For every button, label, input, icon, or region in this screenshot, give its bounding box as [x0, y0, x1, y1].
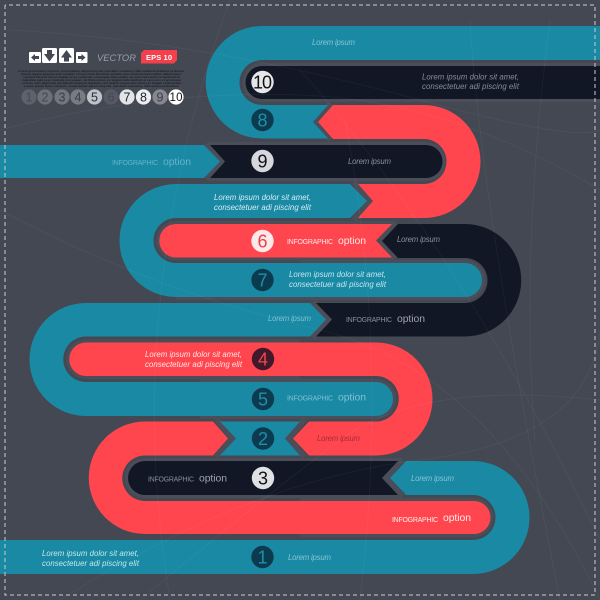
number row: 2	[42, 90, 49, 104]
step 2 badge	[252, 427, 274, 450]
label: row five	[287, 392, 366, 404]
caption: bottom left	[42, 549, 140, 568]
caption: teal lower right: Lorem ipsum	[411, 474, 454, 483]
label: row five: INFOGRAPHIC	[287, 396, 333, 402]
caption: top dark: Lorem ipsum dolor sit amet,	[422, 72, 519, 82]
number row: 7	[124, 90, 131, 104]
step 4 badge: 4	[258, 350, 268, 370]
badge: EPS 10: EPS 10	[146, 53, 172, 62]
label: row six red: option	[338, 236, 366, 247]
small print text block	[18, 69, 184, 88]
caption: dark notch: Lorem ipsum	[397, 235, 440, 244]
badge: EPS 10	[141, 50, 177, 64]
step 2 badge: 2	[258, 429, 268, 449]
caption: top dark: consectetuer adi piscing elit	[422, 82, 520, 91]
band: teal top curve	[206, 26, 600, 138]
label: dark middle: INFOGRAPHIC	[346, 317, 392, 324]
band: dark curve right	[316, 224, 521, 337]
small print text block: dolore magna aliquam erat volutpat. Ut wisi enim ad minim veniam, quis nostrud exerci tation ullamcorper	[21, 72, 182, 76]
small print text block: Lorem ipsum dolor sit amet, consectetuer adi piscing elit, sed diam nonummy nibh euismod tincidunt	[24, 84, 179, 88]
band: red curve middle right	[69, 342, 432, 456]
step 5 badge	[252, 388, 274, 410]
label: row six red: INFOGRAPHIC	[287, 239, 333, 246]
band: dark lower pill	[128, 461, 398, 495]
caption: row four	[145, 350, 243, 369]
band: teal curve left	[119, 184, 482, 297]
caption: row seven: consectetuer adi piscing elit	[289, 280, 387, 289]
band: red curve lower left	[89, 422, 490, 534]
small print text block: et iusto odio dignissim qui blandit praesent luptatum zzril delenit augue duis dolore te feugait nulla facilisi	[22, 81, 181, 85]
step 8 badge: 8	[257, 110, 268, 130]
number row: 1	[26, 90, 33, 104]
band: teal bowtie	[220, 422, 300, 456]
step 1 badge	[251, 546, 274, 568]
step 6 badge	[251, 230, 274, 252]
step 4 badge	[252, 348, 274, 370]
label: row six red	[287, 236, 366, 247]
label: red lower right	[392, 513, 471, 524]
caption: top dark	[422, 72, 520, 91]
step 10 badge: 10	[253, 72, 272, 92]
step 7 badge: 7	[257, 270, 268, 290]
caption: row two: Lorem ipsum	[317, 434, 360, 443]
step 7 badge	[251, 269, 274, 291]
small print text block: suscipit lobortis nisl ut aliquip ex ea commodo consequat. Duis autem vel eum iriure dolor in hendrerit in	[23, 75, 180, 79]
step 6 badge: 6	[257, 232, 268, 252]
band: red curve upper right	[318, 105, 480, 218]
number row: 5	[91, 90, 98, 104]
number row: 4	[75, 90, 82, 104]
step 3 badge: 3	[258, 468, 268, 488]
step 9 badge	[251, 150, 274, 172]
number row: 9	[157, 90, 164, 104]
caption: row four: consectetuer adi piscing elit	[145, 360, 243, 369]
caption: row nine dark: Lorem ipsum	[348, 157, 392, 166]
caption: teal arrow: Lorem ipsum dolor sit amet,	[214, 193, 311, 202]
label: row nine teal: option	[163, 157, 191, 168]
logo: arrow icons	[29, 48, 88, 63]
number row	[21, 89, 184, 105]
label: row three: INFOGRAPHIC	[148, 476, 194, 484]
caption: bottom left: Lorem ipsum dolor sit amet,	[42, 549, 139, 558]
band: teal bottom curve	[0, 461, 530, 574]
step 3 badge	[252, 467, 274, 489]
label: dark middle	[346, 314, 425, 325]
label: red lower right: INFOGRAPHIC	[392, 517, 438, 524]
number row: 6	[108, 90, 115, 104]
number row: 10	[170, 92, 182, 104]
label: row nine teal	[112, 157, 191, 168]
step 8 badge	[251, 109, 274, 131]
number row: 3	[59, 90, 66, 104]
step 5 badge: 5	[258, 390, 268, 410]
gap outlines around inner bands	[69, 66, 600, 534]
caption: bottom left: consectetuer adi piscing elit	[42, 559, 140, 568]
label: vector: VECTOR	[97, 52, 136, 63]
band: dark top pill	[246, 66, 600, 99]
label: red lower right: option	[443, 513, 471, 524]
caption: row seven: Lorem ipsum dolor sit amet,	[289, 270, 386, 279]
caption: bottom: Lorem ipsum	[288, 553, 332, 562]
step 1 badge: 1	[257, 548, 268, 568]
label: row three	[148, 474, 227, 484]
caption: teal arrow	[214, 193, 312, 212]
caption: top teal: Lorem ipsum	[312, 38, 356, 47]
label: row nine teal: INFOGRAPHIC	[112, 160, 158, 167]
band: red pill	[159, 224, 392, 258]
label: row five: option	[338, 392, 366, 404]
caption: teal arrow: consectetuer adi piscing elit	[214, 203, 312, 212]
band: teal arrow left	[0, 145, 220, 178]
small print text block: Lorem ipsum dolor sit amet, consectetuer adi piscing elit, sed diam nonummy nibh euismod tincidunt ut laoreet	[18, 69, 184, 73]
band: dark pill with notch	[210, 145, 442, 178]
label: dark middle: option	[397, 314, 425, 325]
small print text block: vulputate velit esse molestie consequat, vel illum dolore eu feugiat nulla facilisis at vero eros et accumsan	[22, 78, 181, 82]
caption: row four: Lorem ipsum dolor sit amet,	[145, 350, 242, 359]
caption: teal arrow middle: Lorem ipsum	[268, 314, 312, 323]
band: teal curve middle left	[30, 303, 393, 416]
caption: row seven	[289, 270, 387, 289]
step 9 badge: 9	[257, 152, 268, 172]
number row: 8	[140, 90, 147, 104]
label: row three: option	[199, 474, 227, 484]
